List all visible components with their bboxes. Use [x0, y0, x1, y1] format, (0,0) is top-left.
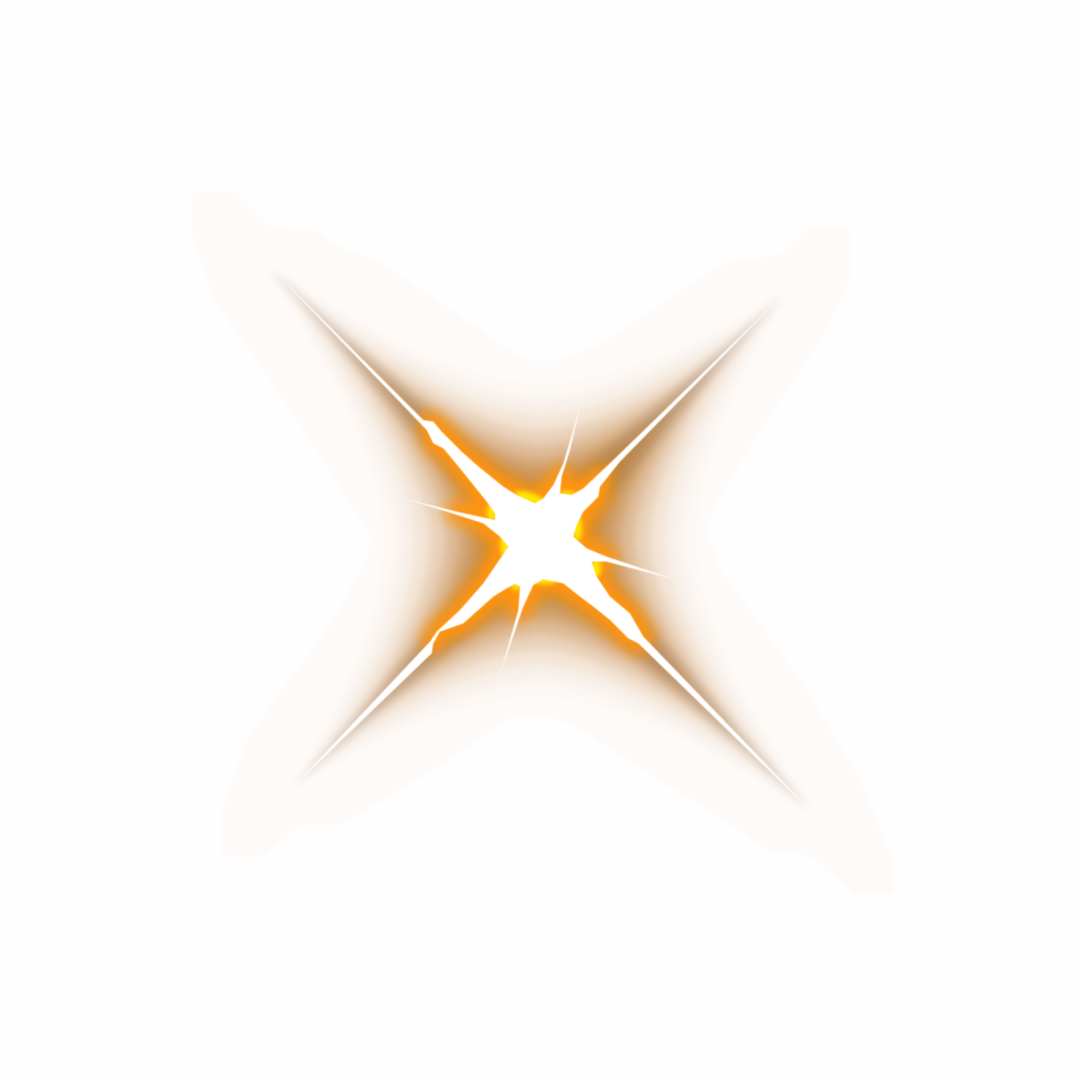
glow layers: pale to brown [265, 265, 815, 815]
grey shading along the diagonal arms [270, 268, 812, 812]
outer pale halo [192, 192, 893, 893]
central star burst [268, 265, 815, 815]
yellow inner patches [487, 488, 601, 590]
white star core with spikes [268, 265, 815, 815]
orange edge glow [430, 422, 643, 643]
